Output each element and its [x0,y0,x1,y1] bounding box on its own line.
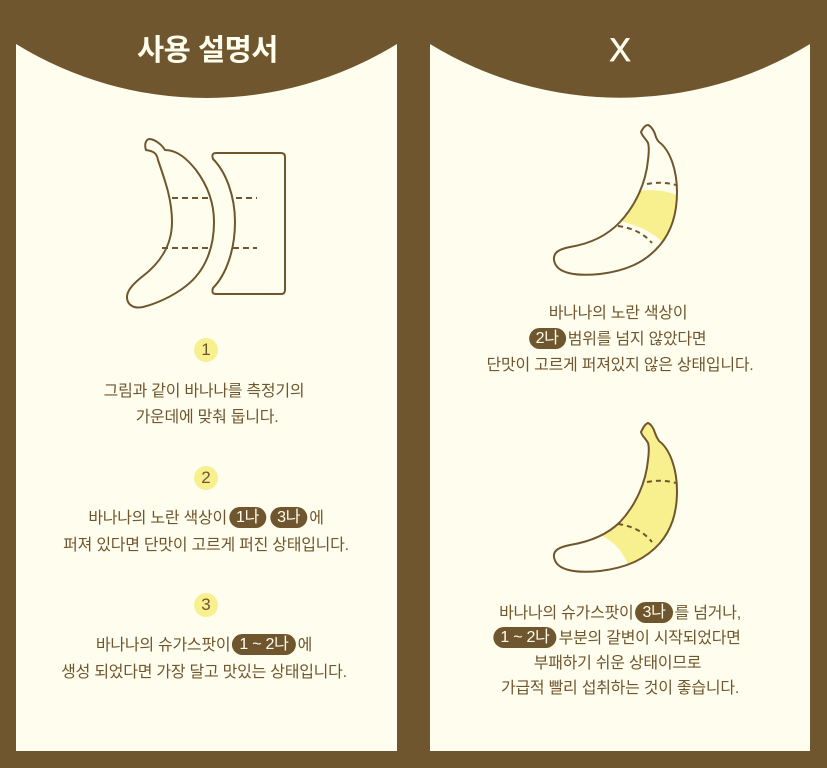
right text 1 line 3: 단맛이 고르게 퍼져있지 않은 상태입니다. [487,357,753,374]
right text 1 line 1: 바나나의 노란 색상이 [549,305,687,322]
step 2 number [194,466,218,490]
step 1 text line 1: 그림과 같이 바나나를 측정기의 [104,383,304,400]
icon: banana with partial yellow band [552,124,678,564]
step 2 text line 1: 바나나의 노란 색상이 에 [88,510,324,527]
title: X: X [609,32,631,68]
step 2 text line 1: 1나 [236,509,259,526]
step 1 text line 2: 가운데에 맞춰 둡니다. [136,409,278,426]
step 2 text line 1: 3나 [277,509,300,526]
right text 2 line 2 [493,627,741,648]
step 3 number [194,593,218,617]
right text 1 line 2: 2나 [536,330,559,347]
right text 2 line 1: 3나 [643,604,666,621]
step 3 text line 2: 생성 되었다면 가장 달고 맛있는 상태입니다. [61,664,347,681]
right text 2 line 2: 부분의 갈변이 시작되었다면 [559,630,741,647]
title: 사용 설명서: 사용 설명서 [137,34,278,67]
step 1 number: 1 [201,340,211,359]
step 3 number: 3 [201,595,211,614]
right text 2 line 1: 바나나의 슈가스팟이 를 넘거나, [499,605,741,622]
step 3 text line 1: 바나나의 슈가스팟이 에 [96,637,312,654]
right text 1 line 2: 범위를 넘지 않았다면 [568,331,706,348]
step 2 number: 2 [201,468,211,487]
step 2 text line 2: 퍼져 있다면 단맛이 고르게 퍼진 상태입니다. [63,537,349,554]
right text 2 line 3: 부패하기 쉬운 상태이므로 [534,655,701,672]
right text 1 line 2 [529,328,706,349]
right text 2 line 4: 가급적 빨리 섭취하는 것이 좋습니다. [501,680,739,697]
step 1 number [194,338,218,362]
right text 2 line 2: 1 ~ 2나 [500,629,550,646]
step 3 text line 1: 1 ~ 2나 [239,636,289,653]
